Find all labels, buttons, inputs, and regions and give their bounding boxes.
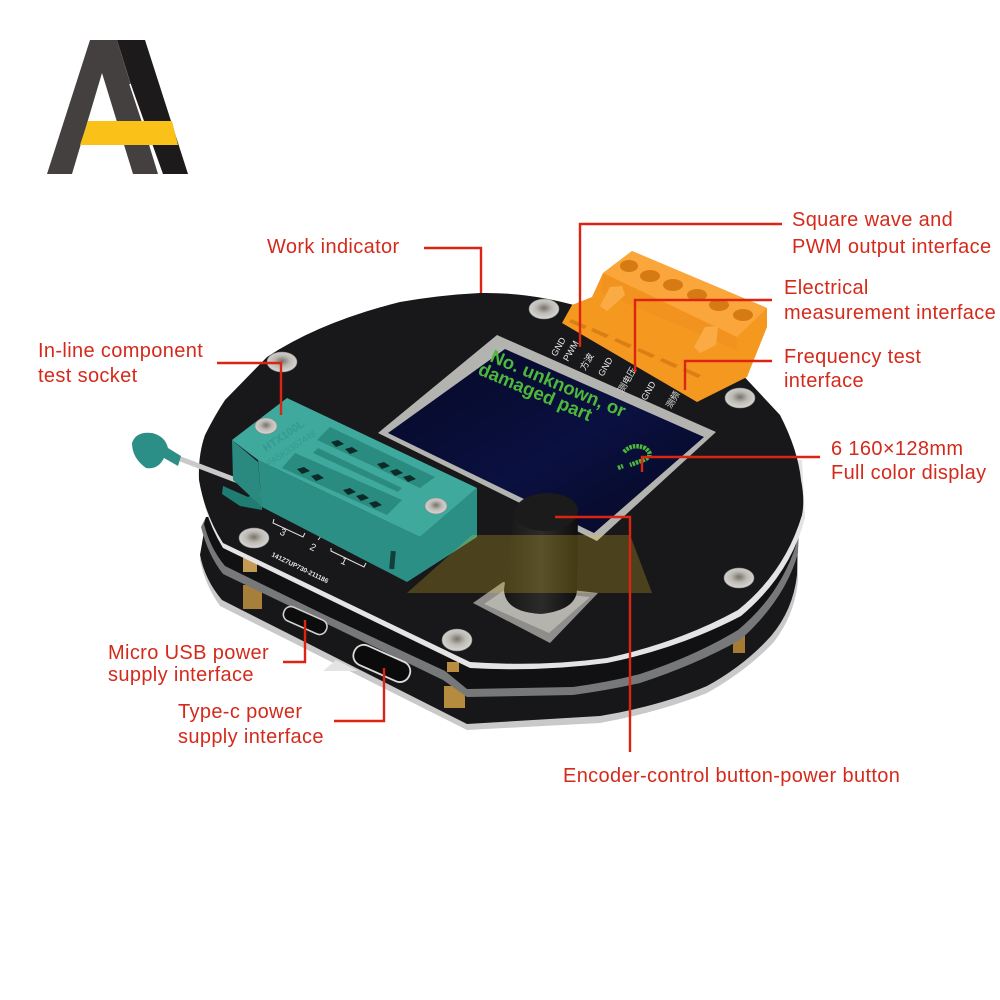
display text: No. unknown, or [487, 345, 629, 421]
socket position marks: 2 [308, 542, 318, 554]
socket position marks: 1 [339, 556, 349, 568]
Display label [642, 438, 986, 484]
Encoder label [555, 517, 900, 787]
Display label: 6 160×128mm [831, 438, 963, 460]
Work indicator label [267, 236, 481, 293]
silkscreen labels: GND [639, 379, 658, 402]
lever knob [132, 433, 181, 468]
display text: damaged part [475, 358, 595, 425]
silkscreen labels: 方波 [577, 351, 596, 372]
watermark band [407, 535, 652, 593]
Display label: Full color display [831, 462, 986, 484]
silkscreen labels: 测频 [663, 389, 682, 410]
silkscreen labels: GND [596, 355, 615, 378]
silkscreen labels [549, 335, 682, 410]
device [132, 251, 805, 730]
silkscreen labels: PWM [561, 339, 581, 363]
top plate [199, 293, 803, 664]
Electrical label: measurement interface [784, 302, 996, 324]
encoder button [473, 491, 598, 643]
display screen [388, 349, 704, 533]
lever [132, 433, 276, 510]
Type-c label [178, 668, 384, 748]
upper standoffs [243, 558, 459, 672]
Work indicator label: Work indicator [267, 236, 400, 258]
screws [239, 299, 755, 651]
test socket: HTX100L [261, 418, 307, 454]
bottom plate [200, 520, 798, 730]
callouts [38, 209, 996, 787]
socket position marks: 141Z7UP730-211186 [270, 552, 330, 585]
silkscreen labels: GND [549, 335, 568, 358]
Socket label: In-line component [38, 340, 203, 362]
orange terminal block [562, 251, 767, 402]
Electrical label [635, 277, 996, 372]
Type-c label: supply interface [178, 726, 324, 748]
Square wave label: Square wave and [792, 209, 953, 231]
Micro USB label [108, 620, 305, 686]
top plate edge [200, 460, 805, 669]
logo [47, 40, 188, 174]
Micro USB label: Micro USB power [108, 642, 269, 664]
display question icon [618, 446, 650, 468]
test socket [232, 398, 477, 582]
socket position marks [270, 519, 366, 585]
watermark fragment [323, 660, 358, 671]
Socket label: test socket [38, 365, 138, 387]
Square wave label: PWM output interface [792, 236, 992, 258]
socket position marks: 3 [278, 527, 288, 539]
silkscreen labels: 测电压 [615, 365, 638, 394]
micro usb port [281, 604, 329, 637]
lower standoffs [243, 585, 745, 708]
socket top slots [317, 427, 435, 488]
Encoder label: Encoder-control button-power button [563, 765, 900, 787]
Square wave label [580, 209, 992, 347]
test socket: PA5K3357448 [265, 428, 318, 469]
Frequency label [685, 346, 921, 392]
Frequency label: interface [784, 370, 864, 392]
type-c port [350, 642, 413, 685]
Micro USB label: supply interface [108, 664, 254, 686]
display frame [378, 335, 716, 541]
Electrical label: Electrical [784, 277, 869, 299]
Frequency label: Frequency test [784, 346, 921, 368]
middle plate [201, 500, 800, 697]
Socket label [38, 340, 281, 415]
Type-c label: Type-c power [178, 701, 302, 723]
